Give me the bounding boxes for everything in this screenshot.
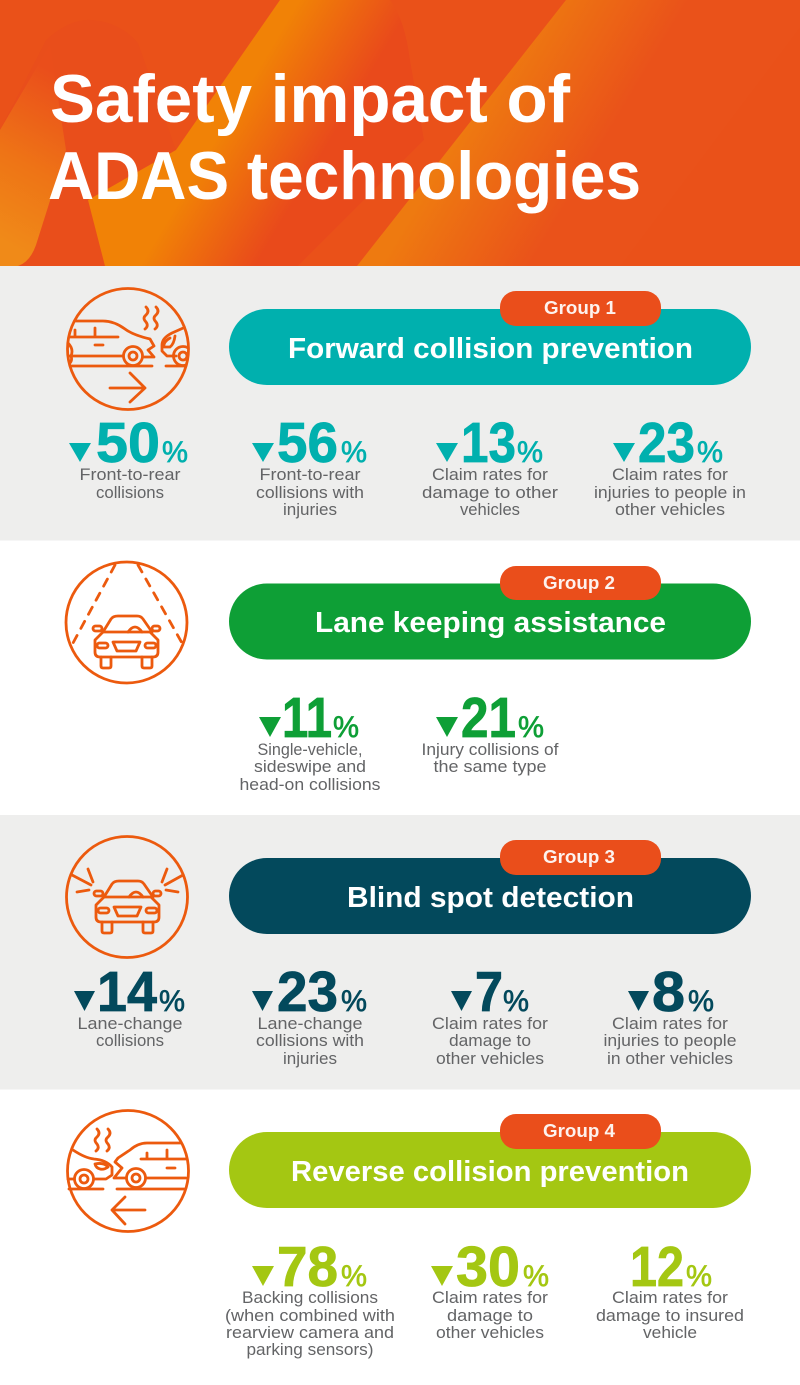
panel: group 3 blind spot detection <box>0 815 800 1090</box>
title: ADAS technologies <box>48 138 641 214</box>
stat: 56%: Front-to-rear <box>260 466 361 484</box>
stat: 30% <box>431 1235 549 1342</box>
stat: 50%: Front-to-rear <box>80 466 181 484</box>
group tag: Group 3 <box>543 847 615 867</box>
stat: 14% <box>74 960 185 1050</box>
stat: 21%: the same type <box>434 758 546 776</box>
stat: 7% <box>432 960 549 1068</box>
stat: 23%: other vehicles <box>615 501 725 519</box>
stat: 11%: sideswipe and <box>254 758 366 776</box>
group tag <box>500 840 661 875</box>
stat: 7%: Claim rates for <box>432 1015 549 1033</box>
stat: 8%: 8 <box>652 960 685 1024</box>
stat: 23%: injuries <box>283 1050 337 1068</box>
stat: 11%: 11 <box>282 686 332 750</box>
stat: 56%: 56 <box>277 411 338 475</box>
heading pill <box>229 858 751 934</box>
stat: 21%: % <box>518 711 544 744</box>
stat: 56%: injuries <box>283 501 337 519</box>
stat: 12%: % <box>686 1260 712 1293</box>
stat: 78%: rearview camera and <box>226 1324 394 1342</box>
stat: 7%: 7 <box>475 960 503 1024</box>
stat: 30%: other vehicles <box>436 1324 544 1342</box>
stat: 14%: 14 <box>97 960 157 1024</box>
heading pill: Lane keeping assistance <box>315 607 666 639</box>
group tag <box>500 291 661 326</box>
stat: 50%: collisions <box>96 484 164 502</box>
heading pill <box>229 1132 751 1208</box>
stat: 12% <box>596 1235 744 1342</box>
stat: 11% <box>240 686 380 794</box>
stat: 56%: collisions with <box>256 484 364 502</box>
title: Safety impact of <box>50 61 570 137</box>
stat: 13%: vehicles <box>460 501 520 519</box>
heading pill <box>229 309 751 385</box>
stat: 23%: % <box>697 436 723 469</box>
stat: 12%: damage to insured <box>596 1307 744 1325</box>
panel: group 4 reverse collision prevention <box>0 1090 800 1385</box>
stat: 11%: Single-vehicle, <box>258 741 362 759</box>
stat: 78%: % <box>341 1260 367 1293</box>
stat: 56% <box>252 411 367 519</box>
stat: 13%: 13 <box>461 411 516 475</box>
stat: 23%: 23 <box>638 411 695 475</box>
stat: 30%: % <box>523 1260 549 1293</box>
stat: 11%: head-on collisions <box>240 776 380 794</box>
heading pill <box>229 584 751 660</box>
stat: 8%: Claim rates for <box>612 1015 729 1033</box>
stat: 14%: Lane-change <box>78 1015 182 1033</box>
stat: 23% <box>594 411 746 519</box>
icon: car between lane lines <box>66 562 187 683</box>
stat: 50%: % <box>162 436 188 469</box>
stat: 7%: damage to <box>449 1032 531 1050</box>
stat: 8% <box>604 960 736 1068</box>
stat: 78%: parking sensors) <box>246 1341 374 1359</box>
panel: group 1 forward collision prevention <box>0 266 800 540</box>
stat: 23%: % <box>341 985 367 1018</box>
stat: 14%: % <box>159 985 185 1018</box>
stat: 23%: Lane-change <box>258 1015 362 1033</box>
group tag <box>500 566 661 600</box>
stat: 23%: Claim rates for <box>612 466 729 484</box>
stat: 7%: other vehicles <box>436 1050 544 1068</box>
stat: 30%: 30 <box>456 1235 520 1299</box>
heading pill: Reverse collision prevention <box>291 1156 689 1188</box>
stat: 12%: vehicle <box>643 1324 697 1342</box>
stat: 12%: 12 <box>630 1235 684 1299</box>
stat: 23%: 23 <box>277 960 338 1024</box>
header banner <box>0 0 800 266</box>
heading pill: Blind spot detection <box>347 882 634 914</box>
group tag: Group 1 <box>544 298 616 318</box>
heading pill: Forward collision prevention <box>288 333 693 365</box>
stat: 8%: % <box>688 985 714 1018</box>
stat: 30%: damage to <box>447 1307 533 1325</box>
stat: 30%: Claim rates for <box>432 1289 549 1307</box>
stat: 21% <box>422 686 559 776</box>
stat: 50%: 50 <box>96 411 160 475</box>
stat: 14%: collisions <box>96 1032 164 1050</box>
stat: 56%: % <box>341 436 367 469</box>
stat: 12%: Claim rates for <box>612 1289 729 1307</box>
stat: 23%: collisions with <box>256 1032 364 1050</box>
stat: 13%: Claim rates for <box>432 466 549 484</box>
stat: 23%: injuries to people in <box>594 484 746 502</box>
stat: 23% <box>252 960 367 1068</box>
panel: group 2 lane keeping assistance <box>0 540 800 815</box>
stat: 78%: 78 <box>277 1235 338 1299</box>
stat: 13%: damage to other <box>422 484 559 502</box>
group tag <box>500 1114 661 1149</box>
stat: 11%: % <box>333 711 359 744</box>
group tag: Group 4 <box>543 1121 615 1141</box>
stat: 78%: Backing collisions <box>242 1289 378 1307</box>
group tag: Group 2 <box>543 573 615 593</box>
stat: 8%: in other vehicles <box>607 1050 733 1068</box>
icon: reversing collision with backward arrow <box>68 1110 188 1232</box>
stat: 50% <box>69 411 188 502</box>
stat: 7%: % <box>503 985 529 1018</box>
stat: 13% <box>422 411 559 519</box>
stat: 13%: % <box>517 436 543 469</box>
stat: 21%: Injury collisions of <box>422 741 559 759</box>
stat: 78% <box>225 1235 395 1359</box>
icon: car with side sensor rays <box>66 836 188 958</box>
stat: 21%: 21 <box>461 686 516 750</box>
icon: rear-end collision with forward arrow <box>68 288 192 410</box>
title <box>48 61 641 214</box>
stat: 78%: (when combined with <box>225 1307 395 1325</box>
stat: 8%: injuries to people <box>604 1032 736 1050</box>
